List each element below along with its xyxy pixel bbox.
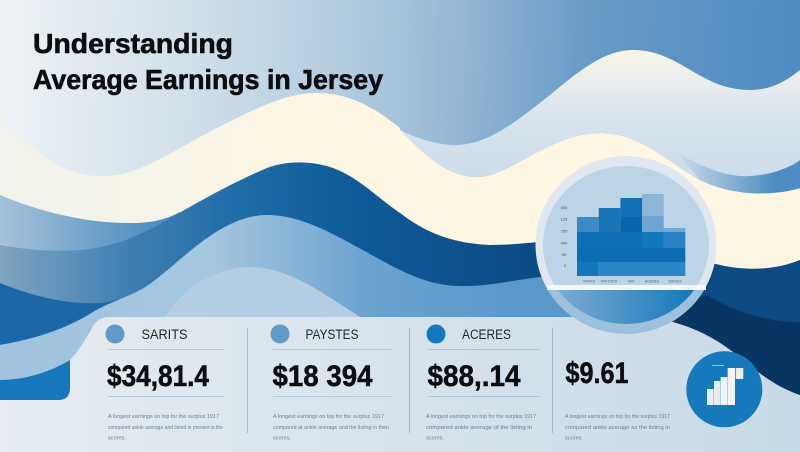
stat: Aceres: A longest earnings on top for the surplus 1917 (426, 414, 536, 420)
stat: Paystes: $18 394 (272, 360, 373, 393)
stat: Aceres: ACERES (462, 327, 511, 342)
stat: Paystes: scores. (273, 436, 291, 442)
stat: Sarits: $34,81.4 (107, 360, 209, 393)
dark left band (0, 283, 143, 345)
light blue hill (0, 215, 700, 385)
stat: Paystes: A longest earnings on top for the surplus 1917 (273, 414, 384, 420)
x axis labels (583, 280, 682, 284)
y axis labels: 600 (561, 205, 568, 210)
stat: Sarits: SARITS (142, 327, 188, 342)
y axis labels: 90 (562, 252, 567, 257)
stat: fourth value: $9.61 (566, 357, 628, 390)
stat: Aceres: scores. (426, 436, 444, 442)
circular chart lens (536, 156, 716, 334)
white strip (547, 285, 706, 290)
title (33, 28, 383, 95)
y axis labels: 750 (561, 228, 568, 234)
x axis labels: WAGES (668, 280, 682, 284)
x axis labels: ACERES (645, 280, 660, 284)
blue corner block (0, 360, 70, 400)
pale inner hill (163, 267, 365, 320)
pale wave (400, 50, 800, 193)
stat: fourth value: scores. (565, 436, 583, 442)
y axis labels: 0 (564, 263, 567, 268)
stat: Aceres: $88,.14 (428, 360, 521, 393)
stat: Paystes (270, 324, 392, 442)
y axis labels: 400 (561, 240, 568, 246)
bottom panel (0, 317, 800, 452)
navy wave right (600, 295, 800, 400)
stat: Sarits (106, 324, 224, 442)
divider (247, 328, 248, 433)
stat: Paystes: PAYSTES (306, 327, 358, 342)
x axis labels: PAYSTES (601, 280, 618, 284)
stat: Sarits: scores. (108, 436, 126, 442)
icon: bar chart badge (686, 351, 762, 427)
y axis labels: 120 (561, 216, 568, 222)
divider (409, 328, 410, 433)
y axis labels (561, 205, 568, 268)
dark blue wave (0, 162, 800, 340)
title: Average Earnings in Jersey (33, 64, 383, 95)
stat: Paystes: compared at ankle average and the listing in then (273, 425, 389, 431)
stat: Aceres (426, 324, 540, 442)
divider (552, 328, 553, 433)
blue band under pale wave (677, 153, 800, 193)
stat: Sarits: A longest earnings on top for the surplus 1917 (108, 414, 219, 420)
stat: Aceres: compared ankle average of the listing in (426, 425, 532, 431)
x axis labels: SRATS (583, 280, 595, 284)
title: Understanding (33, 28, 233, 59)
stat: Sarits: compared ankle average and listed in present is the (108, 425, 223, 431)
cream wave (0, 93, 800, 300)
upper left blue layer (0, 195, 180, 300)
stat: fourth value: A longest earnings on top for the surplus 1917 (565, 414, 670, 420)
stat: fourth value (565, 357, 670, 442)
x axis labels: TAX (628, 280, 635, 284)
stat: fourth value: compared ankle average as the listing in (565, 425, 670, 431)
bar chart (561, 194, 685, 284)
